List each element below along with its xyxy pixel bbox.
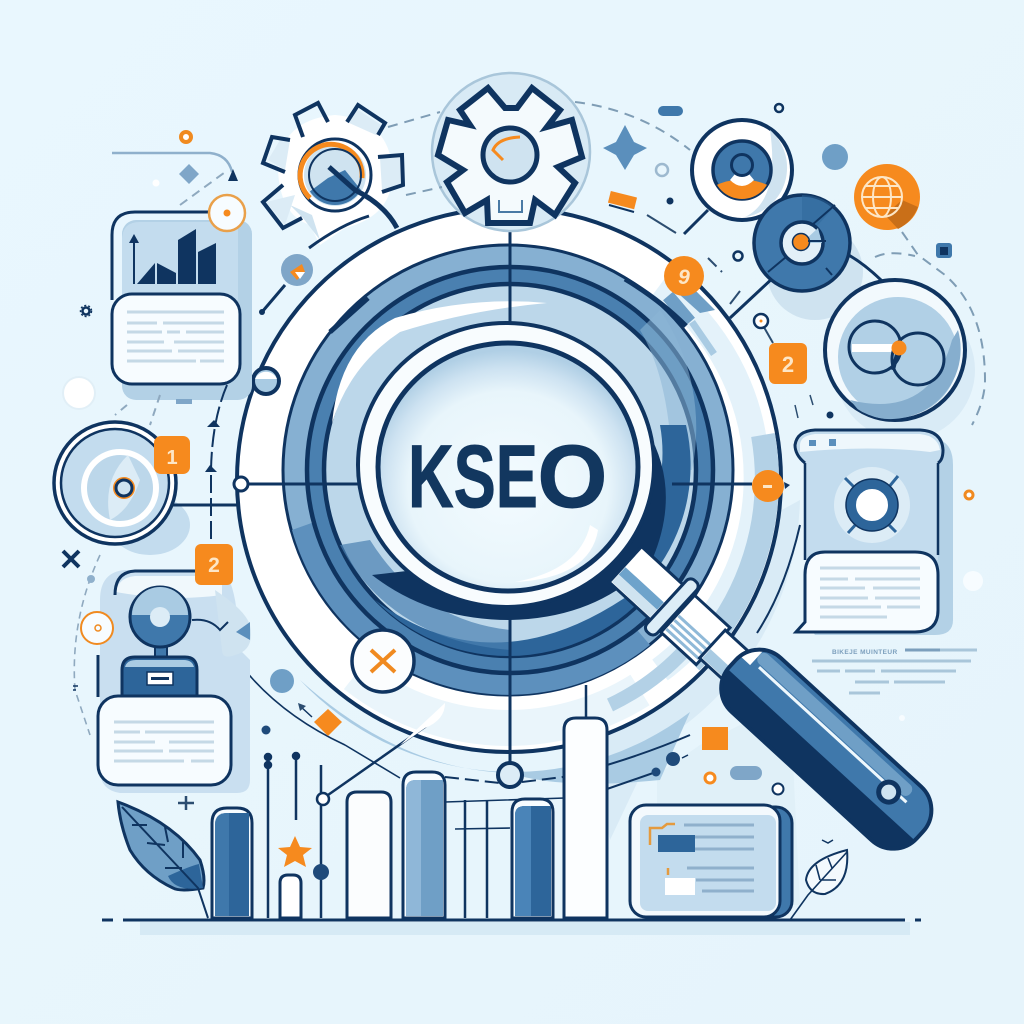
- dashed orbit right: [875, 232, 985, 425]
- panel: bottom right card: [630, 805, 792, 917]
- panel: right card: [795, 430, 953, 635]
- badge: 9: [664, 256, 715, 313]
- caption under right card: [812, 649, 977, 693]
- card gear icon: [834, 467, 910, 543]
- webcam body: [122, 587, 197, 697]
- ring node left cross hair: [234, 477, 248, 491]
- panel: compass circle: [54, 422, 238, 555]
- connector dashes between gears: [388, 102, 690, 195]
- top left deco: [112, 132, 238, 205]
- small leaf right: [790, 840, 847, 920]
- dashed orbit left: [73, 555, 100, 735]
- panel: soft background shapes behind rings: [300, 224, 975, 905]
- dots near venn: [795, 395, 834, 418]
- badge: 2 left: 2: [208, 554, 220, 577]
- chart icon: [129, 229, 216, 284]
- light bands on outer ring: [355, 285, 767, 728]
- floor shadow: [140, 922, 910, 935]
- cross hairs: [241, 225, 752, 770]
- badge: 2 right: [769, 343, 807, 384]
- bar chart: [212, 718, 607, 918]
- text bubble: [796, 552, 938, 632]
- stem connector: [585, 685, 587, 718]
- navy crescent under lens: [372, 430, 666, 620]
- leaf left: [118, 802, 208, 918]
- small ring decoration: [775, 104, 783, 112]
- glow dots right: [899, 491, 983, 721]
- inner pale blue ring: [324, 284, 696, 656]
- badge: 2 right: 2: [782, 352, 794, 377]
- lower right decorations: [652, 752, 784, 794]
- dark blue band at bottom: [375, 565, 668, 656]
- person icon: [684, 120, 792, 234]
- webcam orange ring: [81, 612, 113, 644]
- gear: top left: [263, 103, 403, 248]
- title: O: [537, 426, 607, 526]
- baseline: [102, 918, 921, 922]
- target icon: [730, 195, 882, 318]
- title: KSE: [408, 426, 537, 526]
- globe icon: [854, 164, 920, 230]
- blue outer band: [283, 245, 733, 695]
- navy ring: [307, 267, 713, 673]
- bar 5: [512, 799, 553, 918]
- white glow dot: [63, 377, 95, 409]
- short arc dashes: [647, 215, 740, 304]
- small navy square: [936, 243, 952, 258]
- node with diagonal line: [313, 703, 445, 880]
- lower left decorations: [178, 669, 342, 810]
- ring node on outer ring: [253, 368, 279, 394]
- infographic canvas: [52, 72, 986, 935]
- pill decoration: [658, 106, 683, 116]
- handle hole: [875, 778, 903, 806]
- handle grip: [708, 636, 945, 862]
- handle neck: [602, 539, 763, 694]
- card body: [795, 430, 943, 560]
- badge: 1: [154, 436, 190, 474]
- thin line stems: [265, 753, 487, 918]
- badge: 1: 1: [166, 447, 178, 469]
- small ring: [734, 252, 742, 260]
- caption under right card: BIKEJE MUINTEUR: [832, 649, 898, 656]
- bar 4: [403, 772, 445, 918]
- card tabs: [809, 439, 836, 446]
- bar 1: [212, 808, 252, 918]
- blue dot: [822, 144, 848, 170]
- badge: 2 left: [195, 544, 233, 585]
- panel: chart card: [112, 212, 252, 404]
- ring node bottom: [498, 763, 522, 787]
- lens glass: [378, 343, 638, 591]
- bar 6 tall: [564, 718, 607, 918]
- bar 2 small: [280, 875, 301, 918]
- arc lines lower right: [230, 525, 800, 829]
- panel: webcam card: [81, 570, 251, 793]
- lens frame: [358, 323, 654, 607]
- pale ring decoration: [656, 164, 668, 176]
- orange marker on ring: [752, 470, 790, 502]
- navy dot: [666, 198, 674, 204]
- orange dash: [608, 191, 637, 212]
- magnifier lens assembly: [237, 208, 781, 770]
- venn icon: [825, 280, 965, 420]
- X mark: [63, 551, 79, 567]
- title: [408, 426, 607, 526]
- card shadow: [805, 440, 953, 635]
- star: [278, 836, 312, 867]
- arrow dashes: [115, 385, 227, 540]
- gear: top centre: [432, 73, 590, 231]
- badge: 9: 9: [678, 266, 690, 289]
- orange square: [702, 727, 728, 750]
- orange target on chart card: [209, 195, 245, 231]
- chart card text: [112, 294, 240, 384]
- star decoration: [603, 125, 647, 170]
- small ring with line to badge: [754, 314, 773, 343]
- lens glare: [515, 525, 598, 582]
- node: small link icon: [259, 254, 313, 315]
- bar 3: [347, 792, 391, 918]
- X node on ring: [352, 630, 414, 692]
- handle: [611, 548, 934, 851]
- small gear deco: [80, 306, 92, 316]
- outer white ring: [237, 208, 781, 752]
- webcam card text: [98, 696, 231, 785]
